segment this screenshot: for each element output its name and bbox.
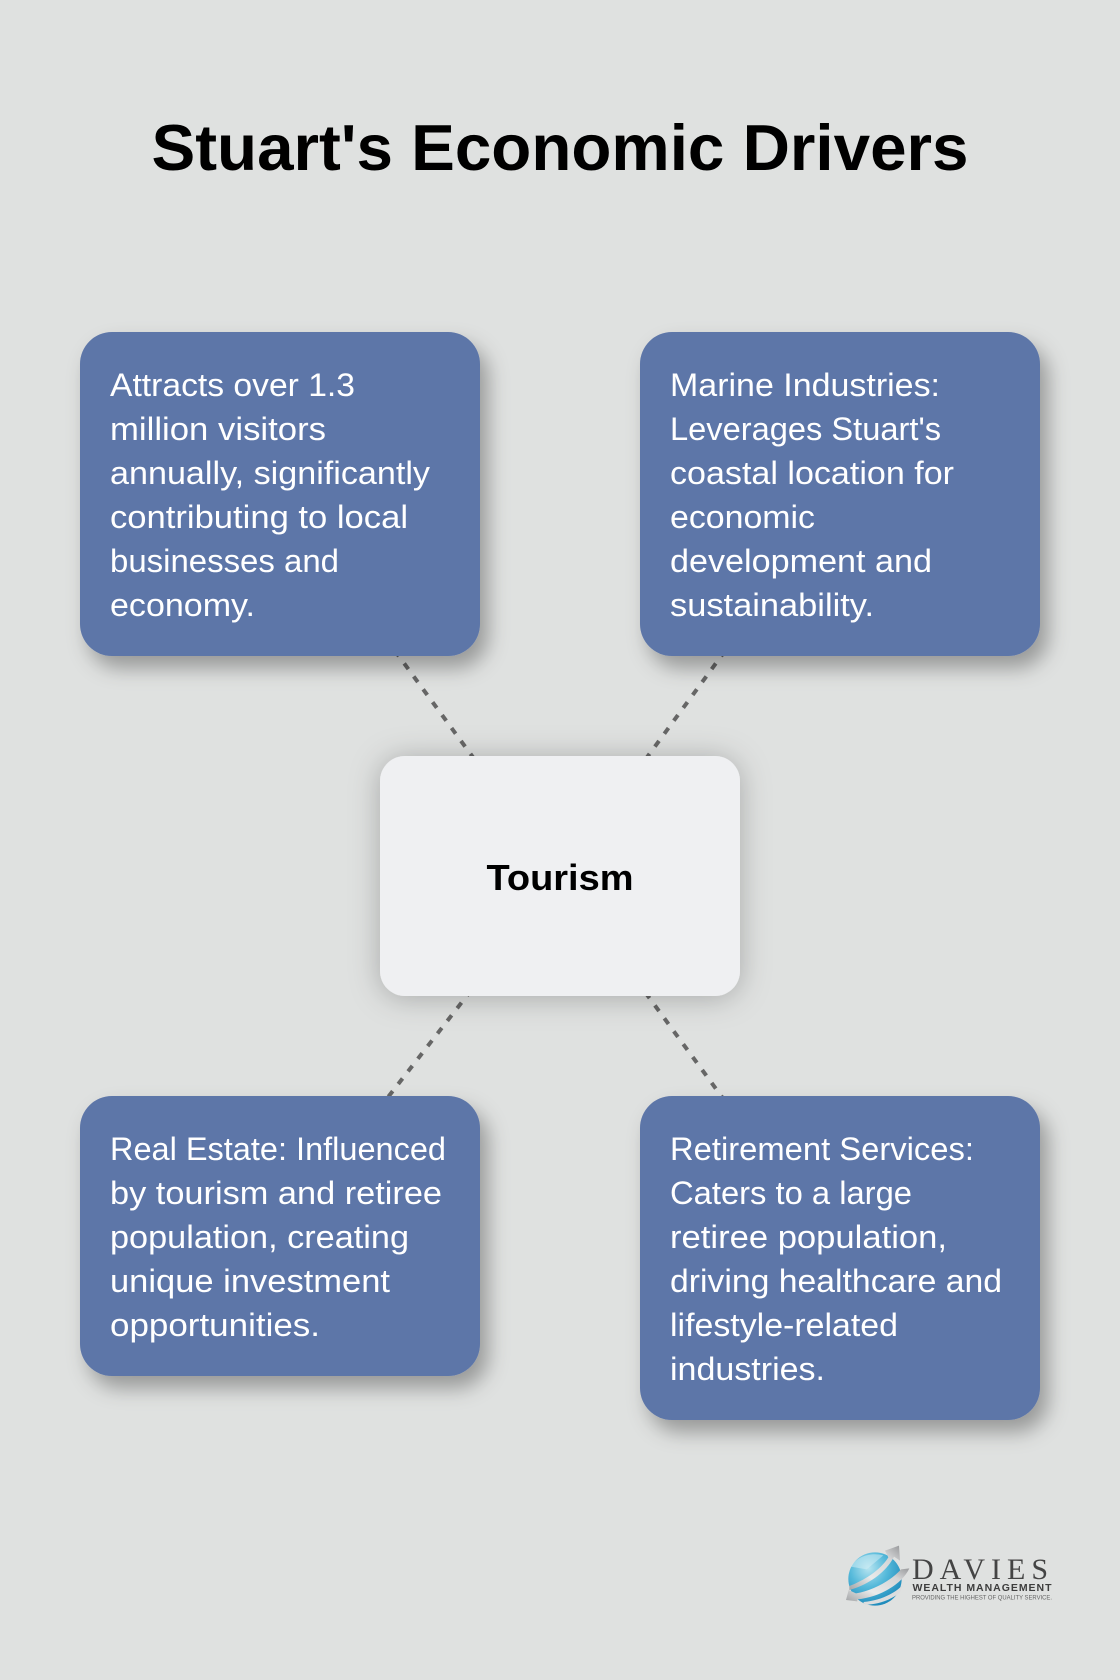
hub label: Tourism: [486, 857, 634, 898]
card text: businesses and: [110, 543, 339, 579]
card text: [110, 367, 430, 623]
card text: Real Estate: Influenced: [110, 1131, 446, 1167]
panel: real estate: [80, 1096, 480, 1376]
card text: economy.: [110, 587, 255, 623]
card text: sustainability.: [670, 587, 874, 623]
card text: economic: [670, 499, 815, 535]
card text: Marine Industries:: [670, 367, 940, 403]
card text: industries.: [670, 1351, 825, 1387]
connector: tourism to visitors card: [280, 494, 560, 876]
card background: [640, 1096, 1040, 1420]
card text: Retirement Services:: [670, 1131, 974, 1167]
connector: tourism to marine industries card: [560, 494, 840, 876]
card background: [80, 1096, 480, 1376]
panel: tourism hub: [380, 756, 740, 996]
card text: [670, 1131, 1002, 1387]
panel: marine industries: [640, 332, 1040, 656]
title: Stuart's Economic Drivers: [152, 111, 968, 184]
panel: retirement services: [640, 1096, 1040, 1420]
card text: [110, 1131, 446, 1343]
card text: million visitors: [110, 411, 326, 447]
icon: globe with arrows: [846, 1546, 909, 1606]
card text: Attracts over 1.3: [110, 367, 355, 403]
card text: unique investment: [110, 1263, 390, 1299]
card background: [640, 332, 1040, 656]
logo tagline: PROVIDING THE HIGHEST OF QUALITY SERVICE.: [912, 1594, 1052, 1602]
card text: population, creating: [110, 1219, 409, 1255]
card text: annually, significantly: [110, 455, 430, 491]
card text: contributing to local: [110, 499, 408, 535]
logo subtitle: WEALTH MANAGEMENT: [912, 1582, 1052, 1594]
card text: coastal location for: [670, 455, 954, 491]
card text: driving healthcare and: [670, 1263, 1002, 1299]
card text: [670, 367, 954, 623]
logo: Davies Wealth Management: [846, 1546, 1052, 1606]
connector: tourism to real estate card: [280, 876, 560, 1236]
card text: by tourism and retiree: [110, 1175, 442, 1211]
card text: retiree population,: [670, 1219, 947, 1255]
card text: development and: [670, 543, 932, 579]
panel: visitors: [80, 332, 480, 656]
card background: [80, 332, 480, 656]
card text: Caters to a large: [670, 1175, 912, 1211]
card text: Leverages Stuart's: [670, 411, 941, 447]
card text: opportunities.: [110, 1307, 320, 1343]
hub background: [380, 756, 740, 996]
card text: lifestyle-related: [670, 1307, 898, 1343]
connector: tourism to retirement services card: [560, 876, 840, 1258]
logo wordmark: DAVIES: [912, 1553, 1048, 1586]
